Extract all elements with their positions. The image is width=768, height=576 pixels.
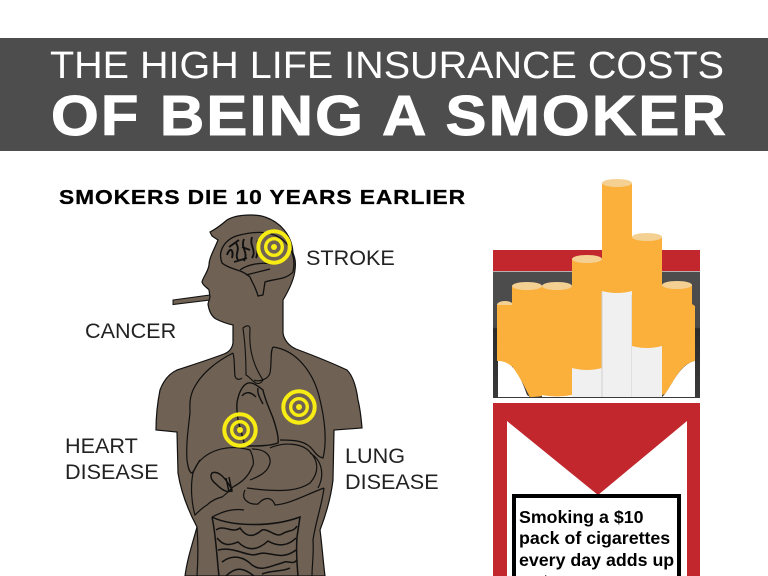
organ: left lung [187, 353, 242, 473]
organ: liver and stomach [192, 444, 324, 515]
cigarettes [497, 179, 695, 397]
organ: brain [221, 232, 294, 296]
label: lung disease: DISEASE [345, 469, 439, 494]
cigarette pack [493, 179, 700, 576]
cigarette 6 [632, 233, 662, 397]
organ: heart [237, 383, 278, 446]
anatomy figure [156, 215, 362, 576]
label: cancer: CANCER [85, 318, 176, 343]
callout: annual cost: Smoking a $10 [519, 507, 644, 527]
heading: smokers die earlier: SMOKERS DIE 10 YEARS EARLIER [59, 187, 466, 209]
icon: cigarette in mouth [173, 295, 210, 304]
organ: trachea [243, 326, 263, 384]
cigarette 7 [662, 281, 695, 397]
organ: brain folds [227, 237, 258, 262]
organ: gallbladder [211, 472, 232, 492]
icon: target on heart [224, 414, 256, 446]
label: heart disease: DISEASE [65, 459, 159, 484]
label: stroke: STROKE [306, 245, 395, 270]
pack front [493, 403, 700, 576]
title banner [0, 38, 768, 151]
cigarette far left [497, 301, 530, 397]
cigarette 5 tallest [602, 179, 632, 397]
organ: large intestine edge [197, 488, 324, 576]
label: heart disease: HEART [65, 433, 138, 458]
cigarette 3 [542, 282, 572, 397]
cigarette 4 [572, 255, 602, 397]
organ: right lung [254, 347, 325, 458]
callout: annual cost: pack of cigarettes [519, 528, 670, 548]
body silhouette [156, 215, 362, 576]
pack top flap [493, 250, 700, 398]
label: lung disease: LUNG [345, 443, 405, 468]
organ: intestines [212, 517, 300, 576]
cigarette 2 [512, 282, 542, 397]
icon: target on brain [258, 231, 290, 263]
icon: target on lung [283, 391, 315, 423]
callout: annual cost: every day adds up [519, 550, 674, 570]
title banner: THE HIGH LIFE INSURANCE COSTS [50, 45, 724, 87]
callout: annual cost [514, 496, 679, 576]
title banner: OF BEING A SMOKER [51, 84, 728, 148]
